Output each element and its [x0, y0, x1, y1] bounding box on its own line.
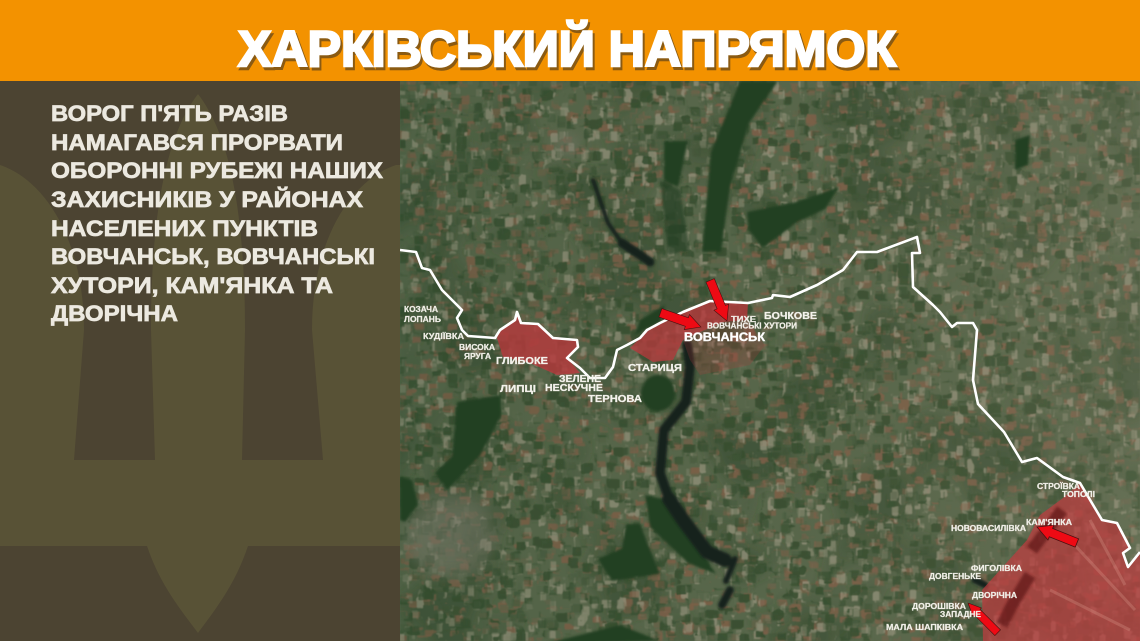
- label: СТАРИЦЯ: [628, 363, 682, 374]
- forests: [400, 81, 1030, 641]
- label: ЛИПЦІ: [500, 384, 536, 395]
- description text block: ОБОРОННІ РУБЕЖІ НАШИХ: [51, 158, 383, 183]
- label: ЗЕЛЕНЕ: [559, 374, 601, 385]
- label: КУДІЇВКА: [423, 332, 464, 341]
- label: ТОПОЛІ: [1062, 490, 1095, 499]
- occupied zone: Kamianka and Dvorichna: [982, 483, 1140, 641]
- title: ХАРКІВСЬКИЙ НАПРЯМОК: [238, 20, 896, 77]
- map labels: [404, 305, 1095, 632]
- arrow: west into Vovchansk: [658, 308, 702, 330]
- label: ЯРУГА: [464, 352, 491, 361]
- label: ЗАПАДНЕ: [940, 610, 982, 619]
- label: ВОВЧАНСЬКІ ХУТОРИ: [707, 322, 797, 330]
- description text block: НАМАГАВСЯ ПРОРВАТИ: [51, 130, 343, 155]
- left panel with trident watermark: [0, 81, 400, 641]
- label: НОВОВАСИЛІВКА: [951, 524, 1026, 533]
- label: МАЛА ШАПКІВКА: [886, 623, 963, 632]
- label: КАМ'ЯНКА: [1026, 518, 1072, 527]
- description text block: ЗАХИСНИКІВ У РАЙОНАХ: [51, 187, 363, 212]
- label: ВОВЧАНСЬК: [684, 332, 766, 344]
- label: ЛОПАНЬ: [404, 315, 441, 324]
- description text block: [51, 101, 383, 326]
- occupied zone: Hlyboke: [497, 312, 580, 375]
- satellite map: [400, 81, 1140, 641]
- rivers and reservoirs: [593, 180, 985, 605]
- description text block: НАСЕЛЕНИХ ПУНКТІВ: [51, 216, 318, 241]
- label: НЕСКУЧНЕ: [545, 383, 603, 394]
- front line: [400, 237, 1140, 567]
- label: КОЗАЧА: [404, 305, 438, 314]
- description text block: ВОВЧАНСЬК, ВОВЧАНСЬКІ: [51, 244, 375, 269]
- faint zone: east of Vovchansk: [683, 320, 765, 375]
- label: ГЛИБОКЕ: [496, 356, 548, 367]
- occupied zone: Starytsia: [630, 312, 683, 362]
- label: СТРОЇВКА: [1037, 482, 1080, 491]
- label: ФИГОЛІВКА: [971, 564, 1022, 573]
- label: ДВОРІЧНА: [972, 591, 1017, 600]
- description text block: ДВОРІЧНА: [51, 301, 178, 326]
- label: ДОВГЕНЬКЕ: [929, 572, 982, 581]
- description text block: ХУТОРИ, КАМ'ЯНКА ТА: [51, 273, 333, 298]
- arrow: north into Vovchansk Khutory: [706, 278, 729, 322]
- description text block: ВОРОГ П'ЯТЬ РАЗІВ: [51, 101, 288, 126]
- label: ДОРОШІВКА: [912, 602, 966, 611]
- urban areas: [404, 135, 579, 577]
- occupied zone: Vovchansk: [683, 301, 748, 340]
- label: БОЧКОВЕ: [764, 311, 817, 322]
- arrow: Kamianka: [1036, 524, 1079, 548]
- label: ТЕРНОВА: [588, 394, 642, 405]
- label: ТИХЕ: [731, 315, 757, 324]
- arrow: Dvorichna: [968, 602, 1001, 636]
- header banner: [0, 0, 1140, 81]
- label: ВИСОКА: [459, 343, 495, 352]
